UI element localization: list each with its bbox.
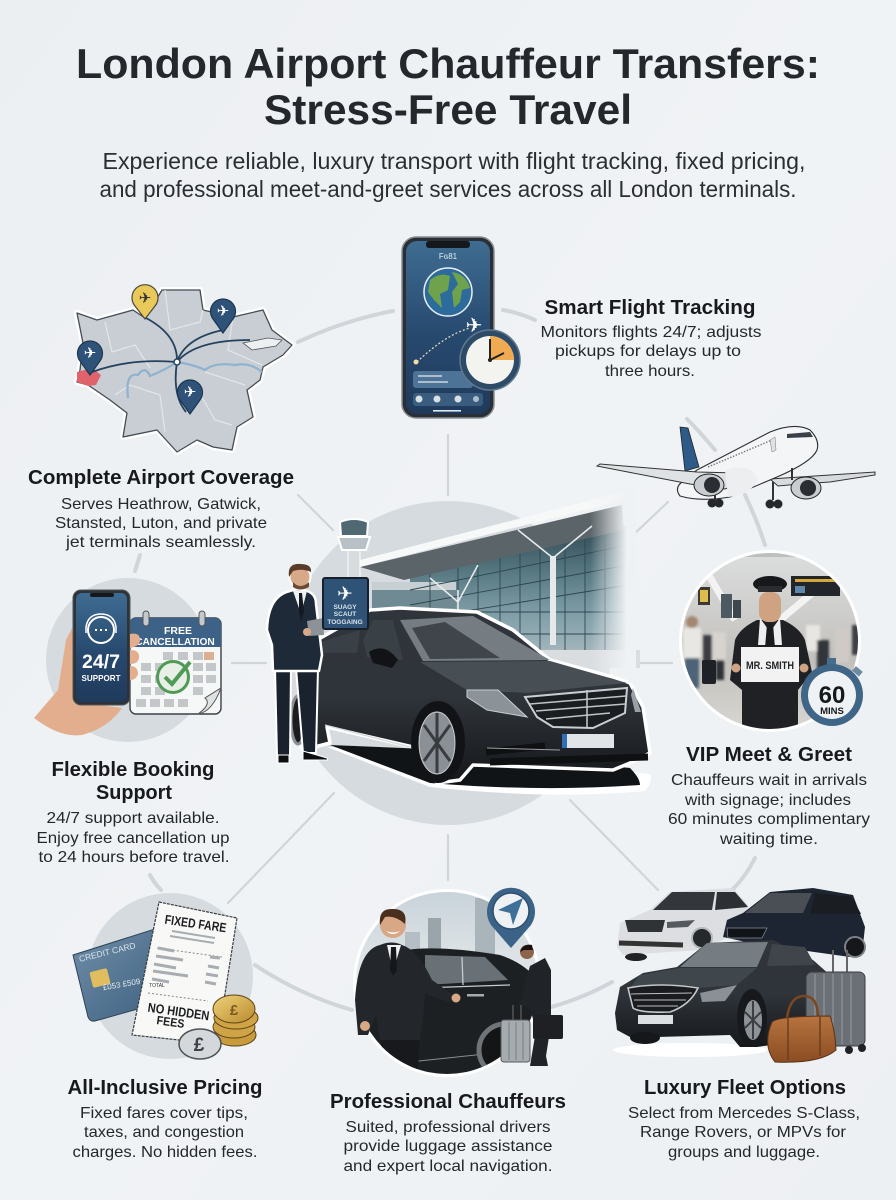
icon: 24/7 support phone and free cancellation calendar: 24/7: [82, 652, 120, 673]
text: chauffeurs description: Suited, professional drivers: [346, 1119, 550, 1136]
chauffeur with tablet: [267, 564, 328, 763]
departures board: [791, 576, 840, 596]
receipt: TOTAL: [149, 983, 165, 989]
text: meet and greet description: 60 minutes complimentary: [668, 811, 870, 828]
silver coin: £: [194, 1035, 205, 1056]
grille: [525, 688, 627, 728]
name sign: [741, 647, 799, 682]
number plate: [562, 734, 614, 748]
photo circle: VIP meet and greet: [679, 550, 863, 740]
black s-class: [615, 940, 830, 1047]
icon: luxury fleet vehicles and luggage: [613, 888, 866, 1062]
pin: north east: [211, 299, 236, 333]
legs: [275, 668, 318, 756]
name sign: MR. SMITH: [746, 660, 794, 672]
title: Stress-Free Travel: [264, 86, 632, 133]
control tower: [338, 519, 370, 580]
silver coin: [179, 1029, 221, 1059]
tablet sign: [323, 578, 368, 629]
connector ring and spokes: [135, 310, 765, 1010]
hand: [34, 628, 122, 735]
text: coverage description: Stansted, Luton, and private: [55, 515, 267, 532]
pin: yellow: [132, 285, 158, 319]
text: chauffeurs description: [344, 1119, 553, 1175]
heading: Complete Airport Coverage: Complete Airport Coverage: [28, 467, 294, 489]
text: pricing description: charges. No hidden fees.: [72, 1144, 258, 1161]
pin: north east: ✈: [217, 303, 229, 320]
stopwatch: [801, 658, 863, 726]
text: fleet description: [628, 1105, 860, 1161]
jacket: [267, 590, 322, 671]
text: flexible booking description: Enjoy free cancellation up: [36, 830, 230, 847]
tablet sign: TOGGAING: [327, 619, 363, 626]
black sedan: [291, 608, 650, 783]
windows: [400, 616, 550, 661]
icon: smartphone with flight tracking: Fɢ81: [439, 252, 458, 261]
tablet sign: SUAGY: [333, 604, 357, 611]
receipt: [132, 902, 237, 1044]
text: fleet description: Select from Mercedes S-Class,: [628, 1105, 860, 1122]
text: meet and greet description: [668, 772, 870, 848]
credit card: £053 £509: [102, 977, 142, 992]
calendar: [130, 611, 221, 714]
heading: Luxury Fleet Options: Luxury Fleet Options: [644, 1077, 846, 1099]
airport terminal: [356, 488, 640, 673]
text: flight tracking description: three hours.: [605, 363, 695, 380]
clock: [460, 330, 520, 390]
pin: west: ✈: [84, 345, 96, 362]
stopwatch: 60: [819, 682, 845, 709]
tablet sign: SCAUT: [334, 611, 356, 618]
pin: yellow: ✈: [139, 290, 151, 307]
icon: London airport map: [77, 285, 292, 452]
heading: All-Inclusive Pricing: All-Inclusive Pricing: [68, 1077, 262, 1099]
pin: south: ✈: [184, 384, 196, 401]
leather bag: [768, 996, 836, 1062]
central illustration: car, terminal and chauffeur: [267, 488, 651, 825]
icon: 24/7 support phone and free cancellation calendar: SUPPORT: [82, 673, 120, 683]
map plane: [243, 338, 282, 350]
heading: Flexible Booking Support: Support: [96, 782, 172, 804]
heading: Smart Flight Tracking: Smart Flight Tracking: [544, 297, 756, 319]
navigation pin: [487, 888, 535, 948]
engines: [694, 474, 821, 499]
title: [76, 40, 820, 133]
stopwatch: MINS: [820, 706, 844, 717]
subtitle: and professional meet-and-greet services across all London terminals.: [100, 176, 796, 202]
white ground: [613, 1043, 767, 1057]
receipt: NO HIDDEN: [147, 1000, 210, 1023]
smiling chauffeur: [355, 909, 460, 1040]
grey suitcase: [806, 950, 866, 1054]
text: chauffeurs description: and expert local navigation.: [344, 1158, 552, 1175]
heading: Professional Chauffeurs: Professional Chauffeurs: [330, 1091, 566, 1113]
hood: [420, 661, 627, 693]
text: fleet description: groups and luggage.: [668, 1144, 820, 1161]
credit card: CREDIT CARD: [78, 940, 137, 964]
tail fin: [680, 427, 699, 471]
photo circle: professional chauffeurs: [350, 888, 563, 1080]
dark MPV: [723, 888, 865, 957]
far wing: [770, 472, 875, 486]
headlight: [467, 690, 527, 717]
roof edge: [356, 492, 624, 567]
pin: west: [78, 341, 102, 375]
text: fleet description: Range Rovers, or MPVs for: [640, 1124, 847, 1141]
text: meet and greet description: with signage; includes: [684, 792, 851, 809]
fuselage: [677, 426, 818, 499]
trousers: [381, 1046, 419, 1070]
white range rover: [617, 888, 748, 961]
shadow: [327, 747, 651, 795]
calendar: FREE: [164, 625, 192, 637]
text: flight tracking description: pickups for delays up to: [555, 343, 741, 360]
credit card: [73, 929, 170, 1021]
heading: VIP Meet & Greet: VIP Meet & Greet: [686, 744, 852, 766]
subtitle: [100, 148, 806, 202]
globe: [424, 268, 472, 316]
front wheel: [411, 701, 465, 783]
text: pricing description: [72, 1105, 258, 1161]
gold coins: [213, 995, 258, 1046]
heading: Flexible Booking Support: [52, 759, 214, 804]
tablet sign: ✈: [337, 584, 353, 605]
icon: receipt, credit card and coins: [73, 893, 258, 1059]
receipt: FEES: [156, 1013, 185, 1031]
text: flight tracking description: Monitors flights 24/7; adjusts: [540, 324, 762, 341]
icon: airplane: [597, 426, 875, 508]
text: flexible booking description: to 24 hours before travel.: [38, 849, 230, 866]
roof underside: [360, 505, 624, 580]
title: London Airport Chauffeur Transfers:: [76, 40, 820, 87]
text: coverage description: Serves Heathrow, Gatwick,: [61, 496, 261, 513]
subtitle: Experience reliable, luxury transport with flight tracking, fixed pricing,: [102, 148, 806, 174]
text: chauffeurs description: provide luggage assistance: [344, 1138, 553, 1155]
icon: 24/7 support phone and free cancellation calendar: [34, 578, 221, 742]
text: flight tracking description: [540, 324, 762, 380]
second chauffeur with luggage: [501, 945, 563, 1066]
text: coverage description: [55, 496, 267, 551]
icon: smartphone with flight tracking: [402, 237, 520, 418]
receipt: FIXED FARE: [164, 912, 228, 935]
heading: Flexible Booking Support: Flexible Booking: [52, 759, 214, 781]
gold coins: £: [230, 1002, 239, 1019]
phone: [73, 590, 130, 705]
icon: smartphone with flight tracking: ✈: [466, 315, 482, 337]
text: coverage description: jet terminals seamlessly.: [65, 534, 256, 551]
text: pricing description: taxes, and congestion: [84, 1124, 244, 1141]
near wing: [597, 464, 750, 489]
text: pricing description: Fixed fares cover tips,: [80, 1105, 248, 1122]
text: meet and greet description: waiting time.: [719, 831, 818, 848]
text: flexible booking description: 24/7 support available.: [46, 810, 220, 827]
text: flexible booking description: [36, 810, 230, 866]
pin: south: [178, 380, 202, 414]
chauffeur: [730, 620, 812, 740]
text: meet and greet description: Chauffeurs wait in arrivals: [671, 772, 867, 789]
calendar: CANCELLATION: [135, 637, 215, 648]
